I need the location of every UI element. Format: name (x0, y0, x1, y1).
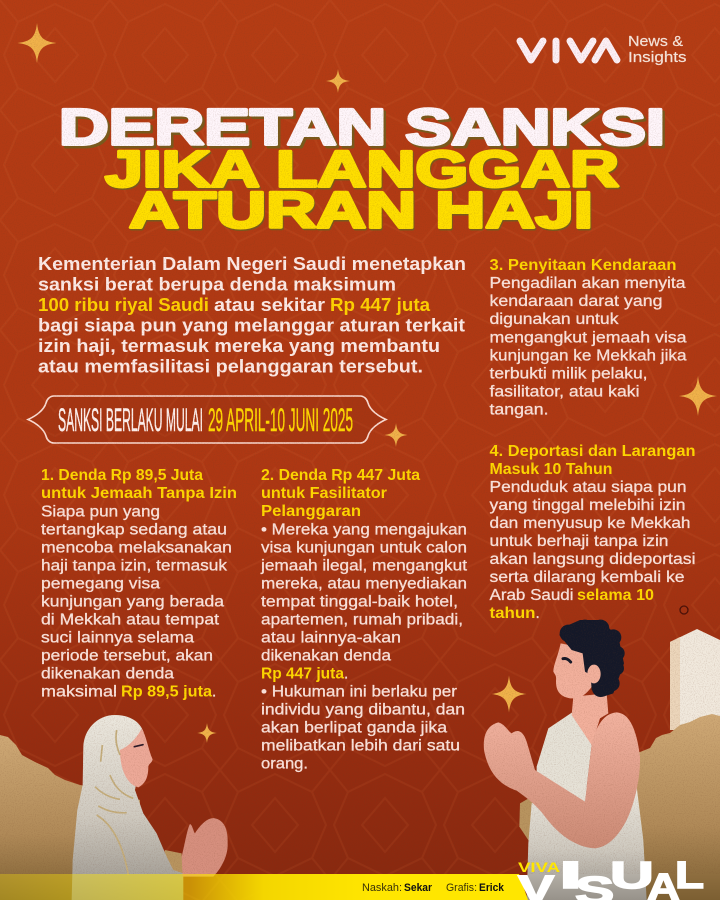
text: sanction 3 body: fasilitator, atau kaki (490, 384, 640, 400)
text: sanction 1 body: tertangkap sedang atau (41, 522, 227, 538)
logo: VIVA News & Insights: Insights (628, 50, 686, 66)
text: sanction 2 body: . (344, 666, 348, 682)
intro paragraph: bagi siapa pun yang melanggar aturan terkait (38, 316, 465, 336)
heading: sanction 4: 4. Deportasi dan Larangan (490, 443, 696, 460)
text: sanction 1 body: dikenakan denda (41, 666, 174, 682)
text: sanction 1 body (41, 504, 232, 700)
illustration: minaret tower (670, 629, 720, 730)
text: sanction 1 body: mencoba melaksanakan (41, 540, 232, 556)
illustration: left sand dune (0, 735, 140, 900)
text: sanction 1 body: Rp 89,5 juta (121, 684, 212, 700)
title line: Deretan Sanksi: DERETAN SANKSI (59, 98, 665, 156)
credits (362, 882, 505, 894)
heading: sanction 2: untuk Fasilitator (261, 485, 387, 502)
logo: VIVA Visual: VIVA (518, 860, 560, 875)
text: sanction 3 body: tangan. (490, 402, 548, 418)
text: sanction 3 body (490, 275, 687, 418)
icon: star near title (326, 69, 350, 93)
text: sanction 2 body: dikenakan denda (261, 648, 391, 664)
text: sanction 2 body: • Mereka yang mengajukan (261, 522, 467, 538)
text: sanction 1 body: . (212, 684, 216, 700)
title line: Aturan Haji: ATURAN HAJI (130, 183, 594, 240)
heading: sanction 1 (41, 467, 237, 502)
title line: Jika Langgar: JIKA LANGGAR (105, 140, 619, 198)
intro paragraph (38, 254, 466, 376)
intro paragraph: Kementerian Dalam Negeri Saudi menetapkan (38, 254, 466, 274)
icon: small ring (680, 606, 688, 614)
intro paragraph: izin haji, termasuk mereka yang membantu (38, 336, 440, 356)
text: sanction 3 body: digunakan untuk (490, 311, 619, 328)
text: sanction 2 body: melibatkan lebih dari satu (261, 738, 460, 754)
text: sanction 1 body: pemegang visa (41, 576, 160, 592)
credits: Erick (479, 882, 505, 894)
text: sanction 2 body: jemaah ilegal, mengangkut (260, 558, 468, 574)
text: sanction 2 body: apartemen, rumah pribadi, (261, 612, 463, 628)
text: sanction 4 body: untuk berhaji tanpa izin (490, 533, 668, 550)
text: sanction 2 body: visa kunjungan untuk calon (261, 540, 467, 556)
panel: sanction 1 (41, 467, 237, 700)
title (59, 98, 668, 240)
illustration: praying man (484, 620, 647, 900)
footer band (0, 874, 528, 900)
text: sanction 1 body: suci lainnya selama (41, 630, 194, 646)
text: sanction 4 body: Penduduk atau siapa pun (490, 479, 686, 496)
intro paragraph: atau memfasilitasi pelanggaran tersebut. (38, 356, 423, 376)
logo: VIVA News & Insights: News & (628, 34, 683, 50)
heading: sanction 2 (261, 467, 420, 520)
heading: sanction 2: 2. Denda Rp 447 Juta (261, 467, 420, 484)
panel: sanction 4 (490, 443, 696, 622)
illustration: praying woman (72, 715, 228, 900)
text: sanction 4 body: Arab Saudi (490, 587, 574, 604)
icon: star beside date badge (384, 423, 408, 447)
text: sanction 4 body (490, 479, 696, 622)
logo: VIVA Visual: U (610, 854, 654, 896)
text: sanction 2 body: akan berlipat ganda jika (261, 720, 447, 736)
intro paragraph: sanksi berat berupa denda maksimum (38, 274, 396, 294)
text: sanction 4 body: tahun (490, 605, 536, 622)
text: sanction 4 body: . (536, 605, 540, 622)
text: sanction 4 body: selama 10 (577, 587, 654, 604)
intro paragraph: 100 ribu riyal Saudi (38, 295, 209, 315)
date badge: SANKSI BERLAKU MULAI (58, 402, 203, 438)
title line: Deretan Sanksi: DERETAN SANKSI (62, 101, 668, 158)
text: sanction 4 body: dan menyusup ke Mekkah (490, 515, 690, 532)
text: sanction 2 body: Rp 447 juta (261, 666, 344, 682)
panel: sanction 3 (490, 257, 687, 418)
logo: VIVA Visual: L (675, 854, 704, 897)
title line: Aturan Haji: ATURAN HAJI (129, 182, 593, 238)
text: sanction 3 body: kendaraan darat yang (490, 293, 662, 310)
logo: VIVA Visual (518, 853, 704, 900)
text: sanction 3 body: terbukti milik pelaku, (490, 366, 648, 382)
icon: star near man (492, 676, 526, 712)
text: sanction 4 body: yang tinggal melebihi izin (490, 497, 686, 514)
title line: Jika Langgar: JIKA LANGGAR (106, 142, 620, 199)
text: sanction 3 body: mengangkut jemaah visa (490, 330, 687, 346)
text: sanction 3 body: Pengadilan akan menyita (490, 275, 686, 292)
text: sanction 1 body: haji tanpa izin, termasuk (41, 558, 227, 574)
text: sanction 1 body: di Mekkah atau tempat (41, 612, 220, 628)
man's hair (559, 620, 625, 697)
text: sanction 4 body: serta dilarang kembali ke (490, 569, 684, 586)
logo: VIVA News & Insights (520, 34, 686, 66)
credits: Sekar (404, 882, 433, 894)
icon: star right column (679, 376, 717, 416)
text: sanction 1 body: Siapa pun yang (41, 504, 160, 520)
heading: sanction 4: Masuk 10 Tahun (490, 461, 612, 478)
text: sanction 2 body: atau lainnya-akan (261, 630, 401, 646)
text: sanction 2 body: mereka, atau menyediakan (261, 576, 467, 592)
intro paragraph: atau sekitar (214, 295, 325, 315)
text: sanction 1 body: periode tersebut, akan (41, 648, 213, 664)
text: sanction 2 body: • Hukuman ini berlaku per (261, 684, 457, 700)
illustration: right sand dune (600, 714, 720, 900)
heading: sanction 2: Pelanggaran (261, 503, 361, 520)
text: sanction 4 body: akan langsung dideportasi (490, 551, 696, 568)
heading: sanction 1: untuk Jemaah Tanpa Izin (41, 485, 237, 502)
text: sanction 1 body: kunjungan yang berada (41, 594, 224, 610)
text: sanction 2 body: individu yang dibantu, dan (261, 702, 465, 718)
text: sanction 2 body: tempat tinggal-baik hotel, (261, 594, 458, 610)
heading: sanction 4 (490, 443, 696, 478)
intro paragraph: Rp 447 juta (330, 295, 431, 315)
icon: star near woman (197, 723, 217, 743)
text: sanction 1 body: maksimal (41, 684, 117, 700)
credits: Grafis: (446, 882, 477, 894)
text: sanction 3 body: kunjungan ke Mekkah jika (490, 348, 687, 364)
date badge (28, 396, 386, 443)
text: sanction 2 body (260, 522, 468, 772)
credits: Naskah: (362, 882, 402, 894)
heading: sanction 3: 3. Penyitaan Kendaraan (490, 257, 676, 274)
date badge: 29 APRIL-10 JUNI 2025 (208, 402, 353, 438)
panel: sanction 2 (260, 467, 468, 772)
heading: sanction 1: 1. Denda Rp 89,5 Juta (41, 467, 203, 484)
logo: VIVA Visual: I (559, 853, 582, 896)
text: sanction 2 body: orang. (261, 756, 308, 772)
icon: star top left (18, 23, 56, 63)
